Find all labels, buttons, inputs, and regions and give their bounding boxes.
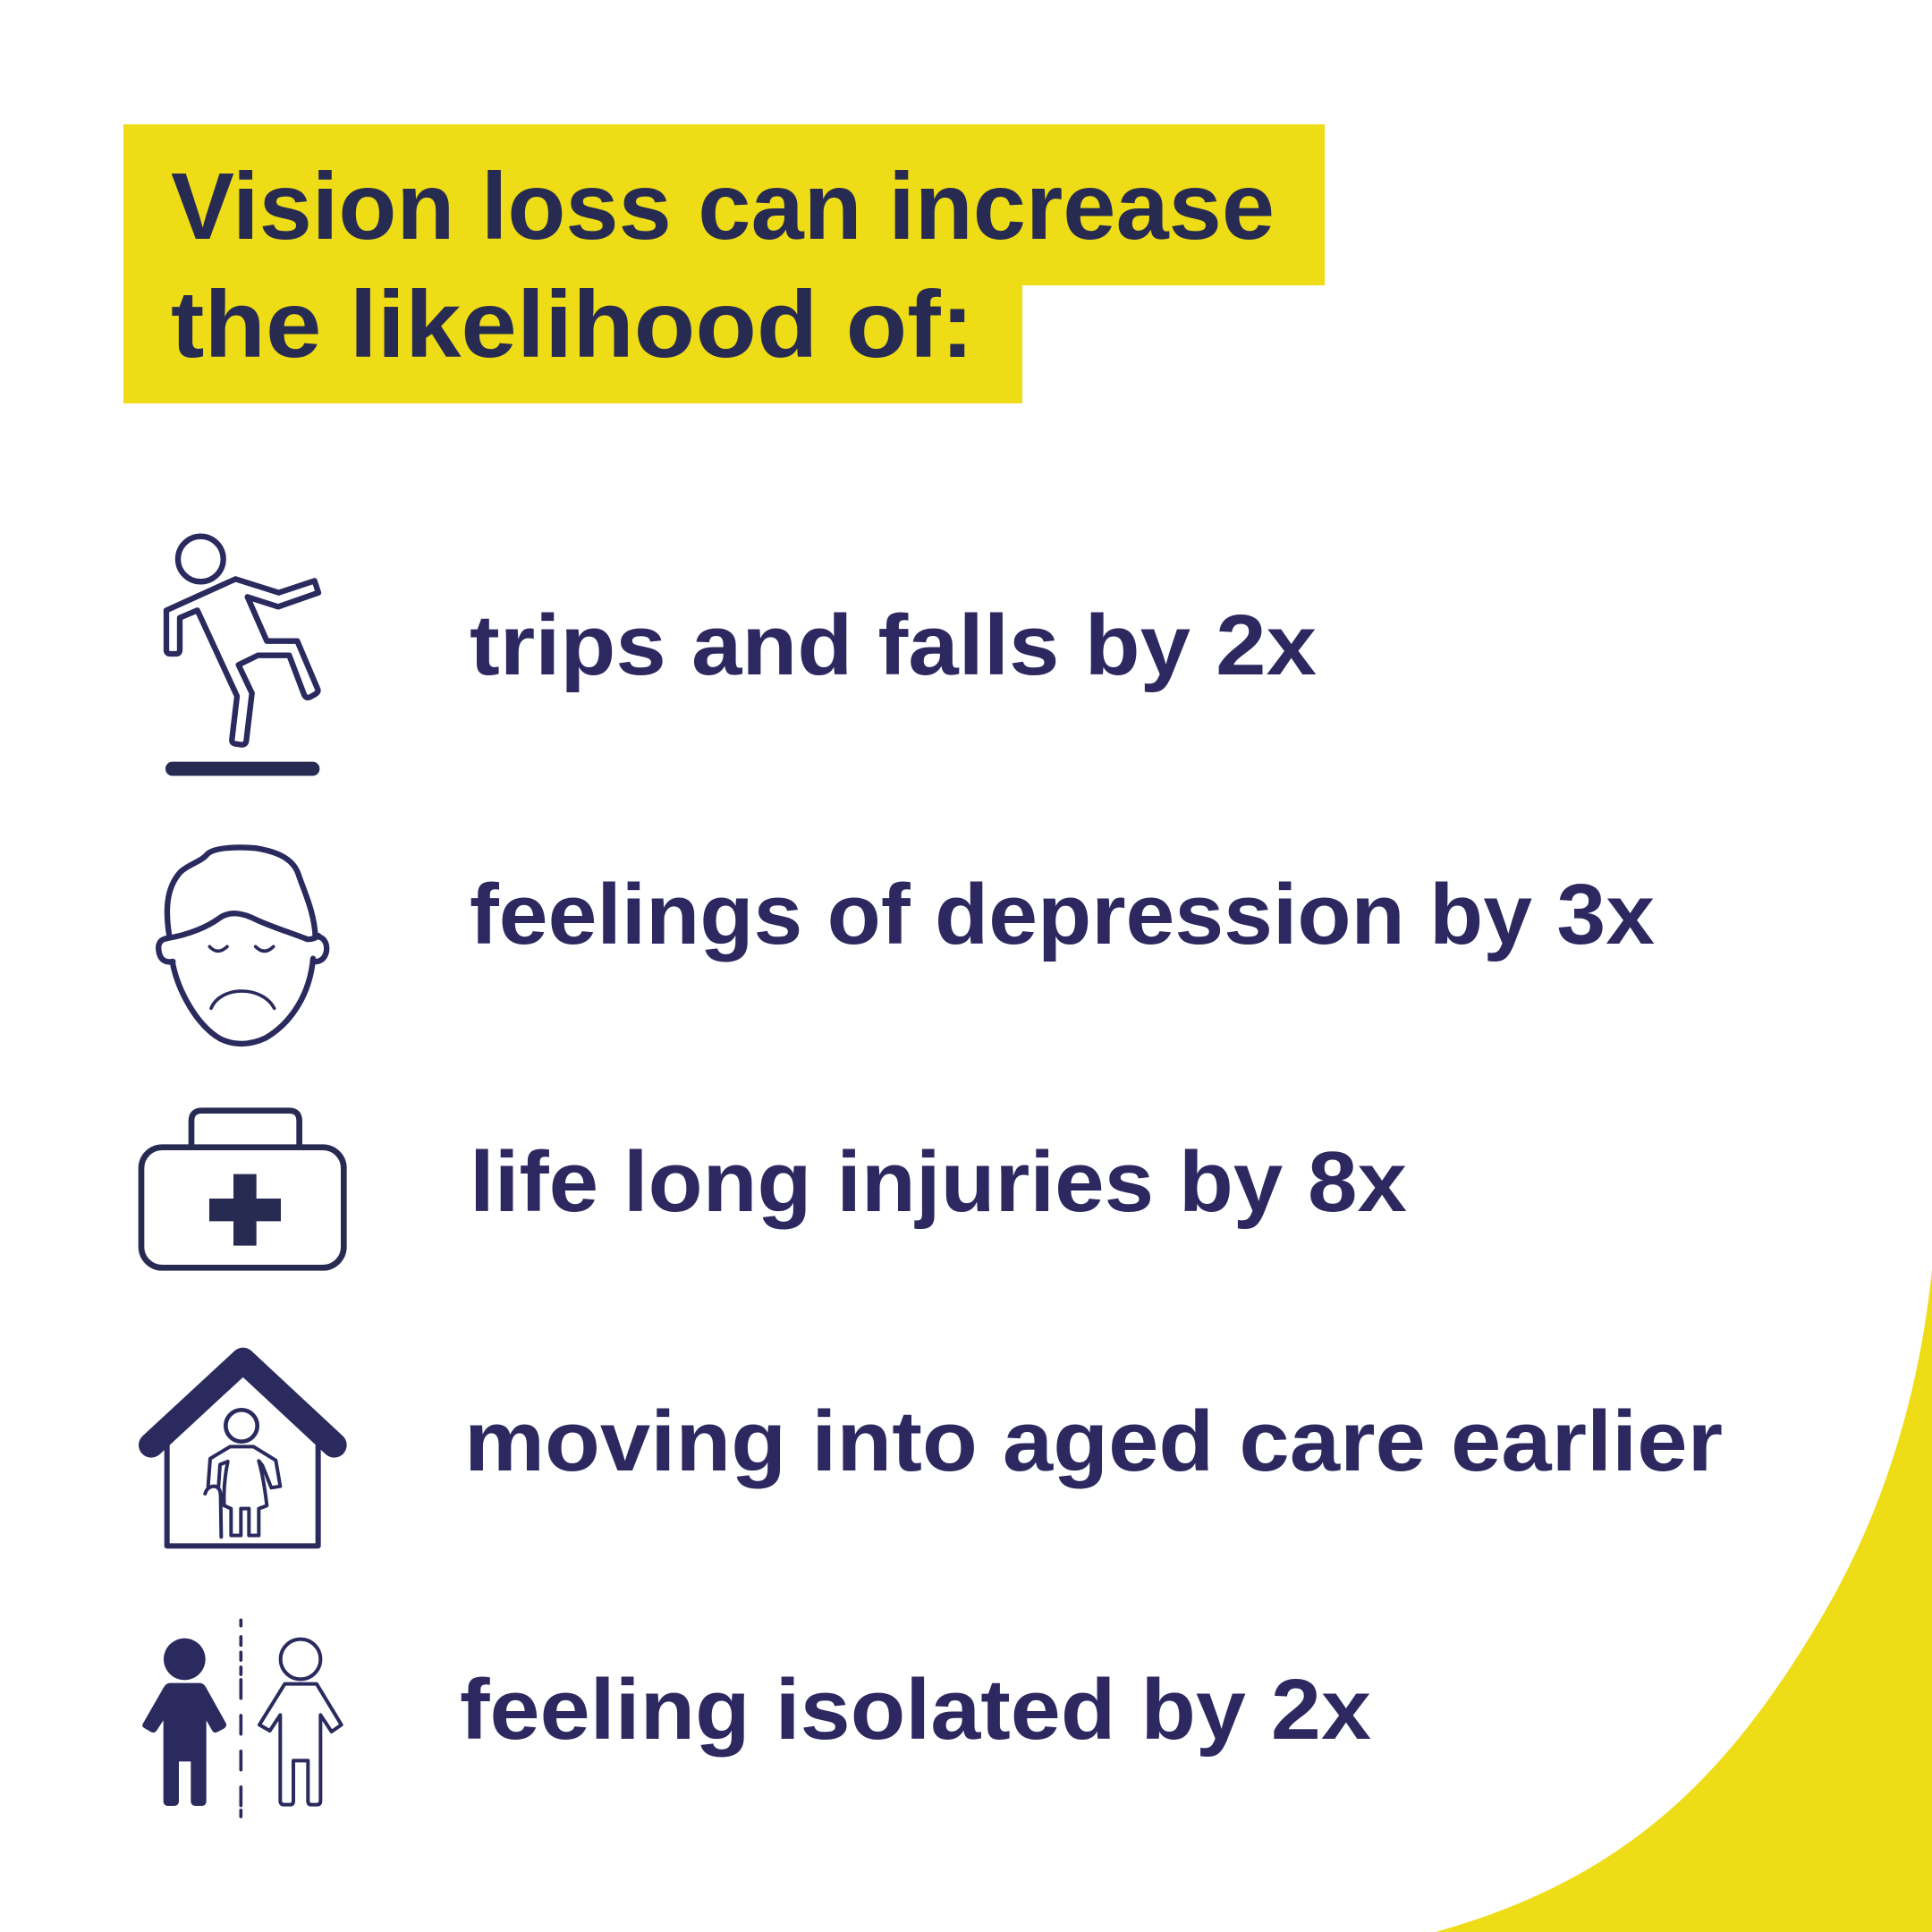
- title banner: [123, 124, 1325, 403]
- text: trips and falls: trips and falls by 2x: [470, 597, 1317, 693]
- icon: sad face: [158, 847, 326, 1044]
- icon: first aid kit: [141, 1111, 343, 1267]
- row: injuries: [141, 1111, 1407, 1267]
- title text: Vision loss can increase: [171, 154, 1275, 259]
- text: depression: feelings of depression by 3x: [470, 867, 1655, 962]
- row: aged care: [151, 1360, 1723, 1546]
- icon: falling person: [165, 537, 319, 775]
- icon: two separated people: [142, 1620, 342, 1817]
- title text: the likelihood of:: [171, 272, 974, 377]
- text: isolation: feeling isolated by 2x: [460, 1662, 1371, 1758]
- row: depression: [158, 847, 1655, 1044]
- row: isolation: [142, 1620, 1371, 1817]
- yellow corner curve: [1436, 1269, 1932, 1932]
- text: aged care: moving into aged care earlier: [464, 1394, 1723, 1489]
- icon: house with elderly person: [151, 1360, 335, 1546]
- row: trips and falls: [165, 537, 1317, 775]
- title text: [171, 154, 1275, 377]
- text: injuries: life long injuries by 8x: [470, 1134, 1407, 1230]
- banner background: [123, 124, 1325, 403]
